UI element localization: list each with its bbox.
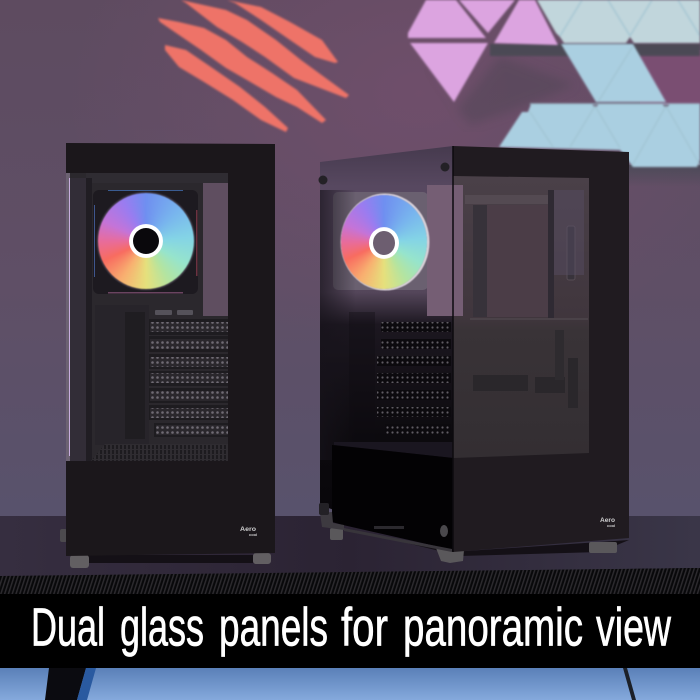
case logo: Aero [600, 518, 615, 524]
right face body [453, 146, 629, 552]
fan blades [341, 195, 427, 289]
left PC case [60, 143, 275, 568]
wall decor: red claw scratches [158, 0, 349, 132]
desk surface [0, 516, 700, 577]
fan frame [93, 190, 198, 294]
case body [66, 143, 275, 556]
corner glass seam [452, 146, 454, 552]
glass edge and side strip [66, 173, 92, 461]
case logo [240, 526, 257, 537]
dark column of left glass [320, 190, 356, 460]
case logo: cool [607, 523, 615, 528]
fan centre glow [369, 227, 399, 259]
caption text: Dual [31, 598, 105, 658]
wall decor: pale blue triangle light panels [499, 0, 700, 167]
case shadow on desk [88, 555, 253, 563]
left glass panel [320, 146, 453, 552]
case logo [600, 518, 615, 528]
case feet [330, 528, 617, 563]
right face glass interior [453, 176, 589, 458]
pale wall block seen through case [203, 183, 228, 316]
fan centre glow [129, 224, 163, 258]
caption text: panels [219, 598, 328, 658]
bottom vent grid [91, 444, 228, 461]
caption text: panoramic [403, 598, 583, 658]
interior seen through glass [66, 173, 228, 461]
fan frame seen through glass [333, 192, 428, 290]
left fan [96, 191, 196, 291]
lower black glass section [332, 445, 453, 550]
bottom sky strip with desk legs [0, 668, 700, 700]
background wall [0, 0, 700, 520]
top interior strip [86, 173, 228, 183]
case side bumper [60, 529, 67, 542]
desk edge carbon strip [0, 568, 700, 596]
fan hub [133, 228, 159, 254]
pale wall block [427, 185, 463, 316]
case logo: cool [249, 532, 257, 537]
shelf above lower section [334, 442, 453, 458]
case logo: Aero [240, 526, 256, 533]
PCI slots [377, 322, 451, 434]
fan blades [98, 193, 194, 289]
caption text: glass [120, 598, 204, 658]
glass mounting bolts [318, 162, 450, 537]
wall decor: pink triangle light panels [408, 0, 558, 102]
caption band [0, 594, 700, 668]
case cable panel [95, 305, 149, 445]
PCI slots [149, 319, 228, 437]
caption text: for [341, 598, 388, 658]
inner dark panels [349, 312, 375, 440]
right fan [340, 192, 430, 292]
fan hub [373, 231, 395, 255]
wall tint and panel shadows behind lights [420, 44, 700, 187]
right PC case [318, 146, 629, 563]
case feet [70, 553, 271, 568]
glass lower edge and side bracket [319, 503, 452, 552]
vents [155, 310, 193, 315]
case shadow on desk [345, 528, 629, 556]
